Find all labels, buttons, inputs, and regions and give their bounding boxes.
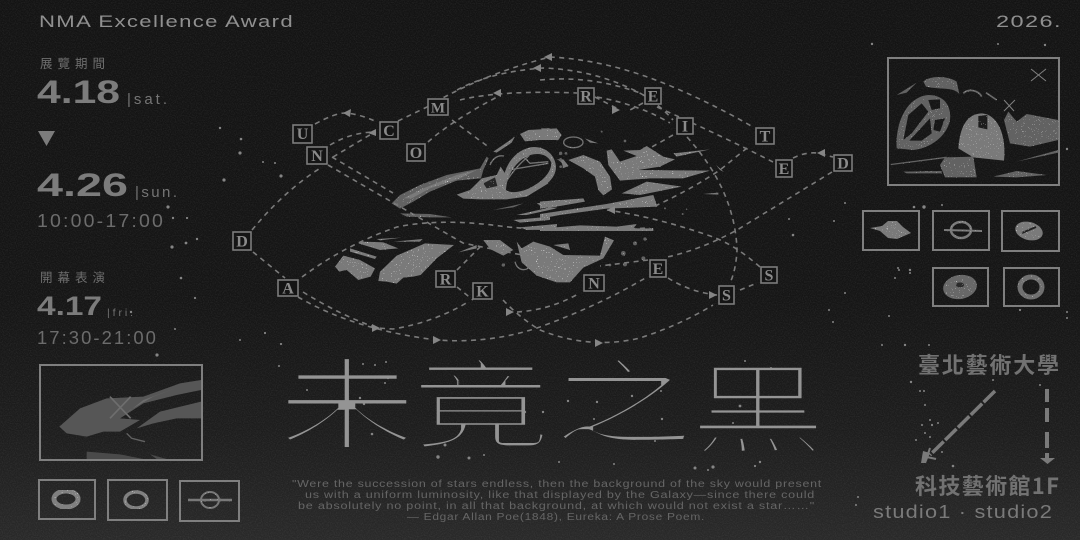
central artwork: abstract black hole figure bbox=[335, 128, 718, 284]
image panel: top right bbox=[888, 58, 1059, 185]
letter N bbox=[307, 147, 327, 165]
letter O bbox=[407, 144, 425, 162]
letter O: O bbox=[410, 145, 422, 162]
opening day: |fri. bbox=[107, 307, 133, 319]
letter S lower: S bbox=[722, 288, 731, 304]
lower figure right bbox=[483, 237, 647, 282]
letter I bbox=[677, 118, 693, 136]
arrow: diagonal to studio bbox=[921, 391, 995, 463]
heading: year: 2026. bbox=[996, 13, 1062, 31]
quotation: — Edgar Allan Poe(1848), Eureka: A Prose Poem. bbox=[407, 512, 705, 523]
letter E right bbox=[776, 160, 792, 178]
letter N lower: N bbox=[588, 276, 600, 292]
letter D left bbox=[233, 232, 251, 250]
letter A bbox=[278, 280, 298, 298]
quotation: be absolutely no point, in all that background, at which would not exist a star……" bbox=[298, 501, 815, 512]
letter E lower: E bbox=[653, 261, 663, 278]
letter T: T bbox=[760, 128, 771, 146]
letter U bbox=[293, 125, 312, 143]
end date: 4.26 bbox=[37, 167, 128, 203]
letter C bbox=[380, 122, 398, 140]
star field bbox=[130, 43, 1068, 506]
opening date: 4.17 bbox=[37, 291, 102, 321]
letter C: C bbox=[383, 123, 395, 140]
letter K bbox=[473, 283, 492, 300]
x marks bbox=[1004, 69, 1046, 111]
letter R upper: R bbox=[580, 88, 592, 106]
letter K: K bbox=[476, 284, 489, 300]
constellation letter boxes bbox=[233, 88, 852, 304]
quotation bbox=[292, 479, 822, 523]
letter E upper: E bbox=[648, 88, 658, 106]
letter A: A bbox=[282, 280, 294, 298]
quotation: "Were the succession of stars endless, then the background of the sky would present bbox=[292, 479, 822, 490]
letter D right: D bbox=[837, 156, 849, 172]
opening performance block bbox=[37, 267, 158, 348]
letter D right bbox=[834, 155, 852, 172]
arrow: vertical to studio bbox=[1040, 389, 1055, 464]
thumbnails: bottom left row bbox=[39, 480, 239, 521]
end day: |sun. bbox=[135, 184, 177, 201]
letter I: I bbox=[682, 118, 688, 136]
start date: 4.18 bbox=[37, 74, 120, 110]
heading: NMA Excellence Award: NMA Excellence Award bbox=[39, 13, 294, 31]
upper figure right bbox=[540, 128, 718, 231]
thumbnails: right upper row bbox=[863, 211, 1059, 251]
letter R lower bbox=[436, 271, 455, 288]
constellation dashed paths bbox=[252, 57, 833, 342]
opening label: 開幕表演 bbox=[40, 267, 105, 286]
letter T bbox=[756, 128, 774, 146]
letter S right: S bbox=[765, 268, 774, 284]
letter M bbox=[428, 99, 448, 116]
path arrowheads bbox=[343, 53, 825, 347]
letter U: U bbox=[297, 126, 309, 143]
letter R lower: R bbox=[440, 272, 452, 288]
location text: Technology and Art Center: 科技藝術館1F bbox=[915, 469, 1059, 501]
exhibition hours: 10:00-17:00 bbox=[37, 211, 165, 231]
image panel: bottom left bbox=[40, 365, 202, 460]
letter D left: D bbox=[236, 234, 248, 250]
opening hours: 17:30-21:00 bbox=[37, 328, 158, 348]
start day: |sat. bbox=[127, 91, 167, 108]
letter N lower bbox=[584, 275, 604, 292]
letter S lower bbox=[719, 286, 734, 304]
lower figure left bbox=[335, 238, 477, 284]
letter E right: E bbox=[779, 161, 789, 178]
exhibition label: 展覽期間 bbox=[40, 53, 105, 72]
main title: 未 bbox=[276, 326, 418, 470]
letter S right bbox=[761, 267, 777, 284]
main title: 竟 bbox=[410, 326, 552, 470]
main title: 之 bbox=[551, 328, 695, 465]
letter E upper bbox=[645, 88, 661, 106]
quotation: us with a uniform luminosity, like that displayed by the Galaxy—since there could bbox=[305, 490, 815, 501]
location text: studios: studio1 · studio2 bbox=[873, 502, 1053, 522]
letter M: M bbox=[431, 100, 445, 116]
main title: 黑 bbox=[689, 330, 827, 475]
thumbnails: right lower row bbox=[933, 268, 1059, 306]
exhibition period block bbox=[37, 53, 177, 231]
letter E lower bbox=[650, 260, 666, 278]
upper figure bbox=[392, 128, 718, 231]
location text: Taipei National University of the Arts: 臺北藝術大學 bbox=[918, 348, 1059, 380]
arrow down triangle bbox=[38, 131, 55, 146]
main title bbox=[276, 326, 827, 475]
letter N: N bbox=[311, 148, 323, 165]
